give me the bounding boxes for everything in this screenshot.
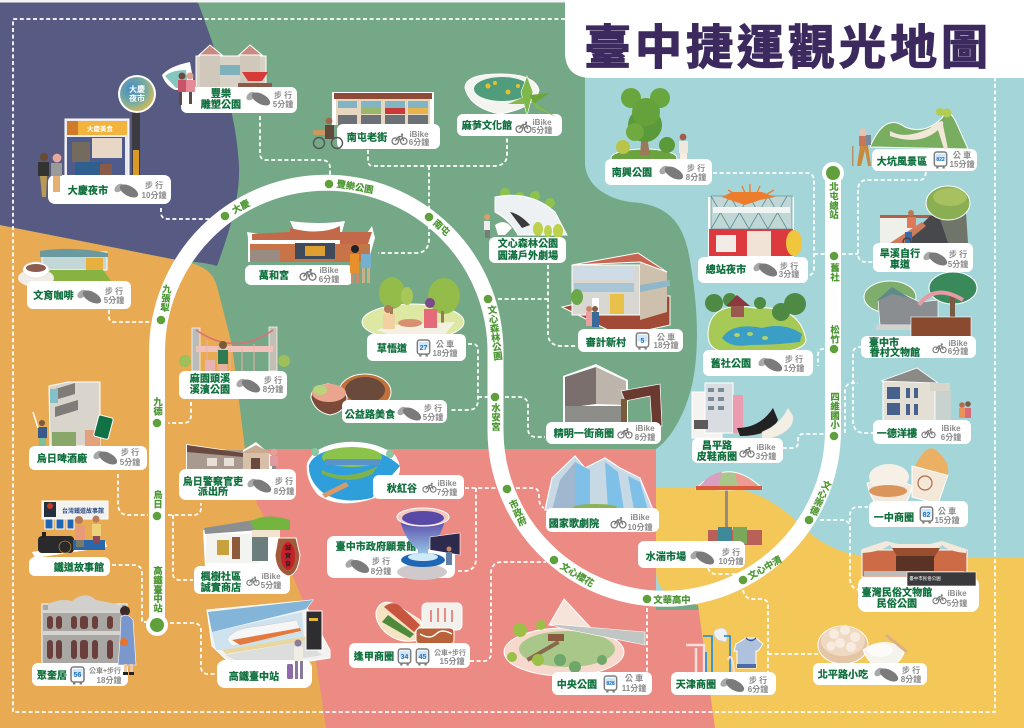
metro stations: 舊社: [829, 262, 840, 282]
landmark: 高鐵臺中站: [207, 600, 330, 688]
label: 步 行: [275, 476, 293, 486]
label: [546, 508, 659, 532]
illustration: national theater: [545, 456, 653, 510]
label: [367, 334, 466, 361]
label: 步 行: [274, 90, 292, 100]
label: 5分鐘: [947, 598, 967, 608]
label: 15分鐘: [440, 656, 464, 666]
landmark: 臺中市眷村文物館: [861, 272, 977, 359]
label: 10分鐘: [142, 190, 166, 200]
label: [552, 672, 652, 695]
label: 舊社公園: [711, 357, 751, 370]
label: 審計新村: [586, 336, 626, 349]
label: 麻園頭溪: [190, 372, 230, 385]
label: [698, 257, 808, 283]
label: 15分鐘: [950, 159, 974, 169]
illustration: jute leaves: [508, 76, 556, 117]
figure: woman in qipao: [118, 606, 136, 675]
label: 56: [74, 672, 81, 679]
label: 公 車: [436, 339, 454, 349]
illustration: shaved ice and cup: [867, 448, 948, 510]
label: 步 行: [785, 354, 803, 364]
metro stations: 文心崇德: [807, 478, 833, 518]
illustration: night market stall and station sign: [65, 75, 156, 177]
illustration: tree park and visitor: [611, 88, 688, 167]
illustration: central park: [504, 599, 645, 676]
label: [181, 87, 297, 113]
label: 5分鐘: [104, 295, 124, 305]
illustration: steam locomotive and visitors: 台灣鐵道故事館: [62, 507, 104, 515]
metro stations: 九張犁: [158, 283, 172, 313]
landmark: 公益路美食: [311, 374, 447, 423]
label: 18分鐘: [433, 348, 457, 358]
illustration: high speed rail platform: [207, 600, 330, 668]
label: 秋紅谷: [387, 482, 417, 495]
label: iBike: [409, 130, 429, 139]
label: [671, 672, 776, 695]
label: [29, 446, 147, 470]
label: 萬和宮: [259, 269, 289, 282]
label: 公 車: [938, 506, 956, 516]
label: 8分鐘: [686, 172, 706, 182]
metro stations: 文華高中: [653, 594, 691, 605]
label: 烏日啤酒廠: [37, 452, 87, 465]
illustration: western style house: [881, 368, 971, 421]
label: [489, 237, 566, 263]
label: 公車+步行: [434, 648, 466, 657]
label: iBike: [261, 572, 281, 581]
label: 公 車: [953, 150, 971, 160]
label: [873, 420, 971, 444]
landmark: 烏日警察官吏派出所: [179, 442, 296, 500]
illustration: hill trail and hiker: [852, 108, 968, 166]
illustration: night market stall and station sign: 大慶: [129, 84, 145, 94]
label: 步 行: [372, 556, 390, 566]
label: [873, 243, 973, 272]
landmark: 豐樂雕塑公園: [162, 45, 297, 113]
label: 8分鐘: [263, 384, 283, 394]
label: 6分鐘: [409, 137, 429, 147]
label: 圓滿戶外劇場: [498, 249, 558, 262]
illustration: temple: [247, 221, 375, 262]
illustration: hot pot and bowl: [311, 374, 391, 415]
landmark: 麻園頭溪溪濱公園: [179, 327, 290, 399]
illustration: picnic in the park: [362, 277, 464, 340]
metro stations: 大慶: [230, 197, 252, 216]
label: [546, 422, 661, 444]
label: 5: [641, 338, 645, 345]
label: 草悟道: [377, 342, 407, 355]
label: 總站夜市: [706, 263, 746, 276]
label: 楓樹社區: [201, 570, 241, 583]
landmark: 鐵道故事館: [29, 501, 110, 576]
label: 烏日警察官吏: [183, 475, 243, 488]
label: 天津商圈: [676, 678, 716, 691]
landmark: 水湍市場: [638, 472, 762, 568]
landmark: 秋紅谷: [307, 442, 464, 503]
label: 3分鐘: [779, 269, 799, 279]
illustration: coffee cup and building: [18, 249, 111, 287]
label: 步 行: [902, 665, 920, 675]
label: 步 行: [949, 249, 967, 259]
label: iBike: [630, 513, 650, 522]
landmark: 南興公園: [605, 88, 712, 185]
illustration: steamer basket and dumplings: [818, 625, 907, 668]
label: 旱溪自行: [880, 247, 920, 260]
label: 麻芛文化館: [462, 119, 512, 132]
label: 昌平路: [702, 439, 732, 452]
landmark: 臺灣民俗文物館民俗公園: [858, 541, 979, 612]
label: [32, 663, 128, 686]
landmark: 旱溪自行車道: [873, 186, 973, 272]
label: 45: [419, 654, 426, 661]
metro stations: 北屯總站: [828, 181, 839, 220]
landmark: 大慶夜市: [38, 75, 171, 204]
label: iBike: [635, 424, 655, 433]
illustration: old street shops: [332, 92, 434, 125]
label: 公 車: [657, 332, 675, 342]
label: 27: [420, 345, 427, 352]
landmark: 國家歌劇院: [545, 456, 659, 532]
label: 派出所: [198, 485, 228, 498]
label: 眷村文物館: [870, 346, 920, 359]
label: 精明一街商圈: [554, 427, 614, 440]
landmark: 北平路小吃: [813, 625, 927, 685]
label: 誠實商店: [201, 581, 241, 594]
illustration: sausage roll and takoyaki: [376, 602, 462, 644]
illustration: jute leaf soup bowl: [465, 74, 539, 114]
illustration: folk museum courtyard: [862, 541, 967, 577]
metro stations: 文心中清: [746, 553, 784, 582]
illustration: night market gate: [708, 184, 802, 259]
illustration: park with pond and pavilion: [705, 293, 806, 352]
illustration: outdoor theatre shell: [484, 188, 567, 238]
illustration: vision museum fountain: [397, 508, 460, 580]
landmark: 文心森林公園圓滿戶外劇場: [484, 188, 567, 263]
illustration: riverside bike path: [880, 186, 970, 246]
metro stations: 文心森林公園: [486, 304, 503, 362]
label: [638, 541, 745, 568]
label: [872, 149, 977, 171]
label: 6分鐘: [948, 346, 968, 356]
label: [692, 438, 783, 463]
label: 11分鐘: [622, 683, 646, 693]
label: 步 行: [687, 163, 705, 173]
label: 8分鐘: [901, 674, 921, 684]
label: 步 行: [722, 547, 740, 557]
label: 5分鐘: [273, 99, 293, 109]
label: iBike: [532, 118, 552, 127]
metro stations: 市政府: [506, 497, 528, 529]
label: 5分鐘: [532, 125, 552, 135]
illustration: honesty wine jar: 食: [285, 560, 291, 568]
label: [813, 663, 927, 685]
label: 大慶夜市: [68, 184, 108, 197]
label: 34: [401, 654, 408, 661]
label: [327, 536, 455, 578]
label: 臺中市: [869, 336, 899, 349]
illustration: historic mansion: [42, 595, 127, 664]
landmark: 一德洋樓: [873, 368, 971, 444]
label: 步 行: [121, 447, 139, 457]
illustration: lake park: [307, 442, 400, 503]
label: 步 行: [749, 675, 767, 685]
metro stations: 水安宮: [490, 402, 501, 432]
label: 高鐵臺中站: [229, 670, 279, 683]
label: 18分鐘: [97, 675, 121, 685]
label: [349, 643, 470, 668]
label: 6分鐘: [941, 432, 961, 442]
label: 公益路美食: [345, 408, 395, 421]
landmark: 臺中市政府願景館: [327, 508, 460, 580]
metro stations: 九德: [152, 396, 163, 416]
landmark: 逢甲商圈: [349, 602, 470, 668]
illustration: buildings and shoes: [692, 383, 793, 438]
label: 鐵道故事館: [54, 561, 104, 574]
label: 臺灣民俗文物館: [862, 586, 932, 599]
label: [858, 577, 979, 612]
metro stations: 南屯: [431, 217, 453, 238]
illustration: building and arch gate: [563, 364, 662, 426]
illustration: historic police station: [186, 442, 278, 476]
landmark: 麻芛文化館: [457, 74, 562, 136]
illustration: honesty wine jar: 實: [285, 552, 291, 560]
label: 10分鐘: [628, 522, 652, 532]
label: 聚奎居: [37, 669, 67, 682]
metro route line: [146, 162, 844, 636]
label: 1分鐘: [784, 363, 804, 373]
landmark: 昌平路皮鞋商圈: [692, 383, 793, 463]
label: 逢甲商圈: [354, 650, 394, 663]
landmark: 大坑風景區: [852, 108, 977, 171]
label: [703, 350, 813, 376]
metro stations: 文心櫻花: [558, 560, 596, 589]
label: 10分鐘: [719, 556, 743, 566]
label: 822: [936, 157, 945, 163]
title panel: 臺中捷運觀光地圖: [584, 21, 992, 74]
label: 15分鐘: [935, 515, 959, 525]
label: 南興公園: [612, 166, 652, 179]
title panel: [565, 0, 1024, 78]
figure: traveller with suitcase: [287, 640, 303, 679]
illustration: sculpture park building: [162, 45, 272, 90]
illustration: clothes and racks: [686, 628, 763, 672]
figures: visitors: [178, 72, 195, 105]
metro stations: 豐樂公園: [336, 178, 374, 195]
landmark: 中央公園: [504, 599, 652, 695]
label: 18分鐘: [654, 340, 678, 350]
label: 7分鐘: [437, 487, 457, 497]
label: 828: [606, 681, 615, 687]
illustration: night market stall and station sign: 大慶美食: [87, 124, 114, 133]
illustration: night market stall and station sign: 夜市: [129, 93, 145, 103]
label: iBike: [941, 424, 961, 433]
landmark: 萬和宮: [245, 221, 375, 285]
landmark: 審計新村: [562, 253, 683, 352]
label: 雕塑公園: [201, 98, 241, 111]
label: 8分鐘: [635, 432, 655, 442]
illustration: brewery building and visitor: [33, 382, 114, 448]
label: 6分鐘: [748, 684, 768, 694]
label: 文育咖啡: [33, 289, 74, 302]
metro stations: 烏日: [152, 489, 163, 509]
landmark: 草悟道: [362, 277, 466, 361]
landmark: 一中商圈: [867, 448, 968, 527]
label: 北平路小吃: [818, 668, 868, 681]
label: iBike: [437, 479, 457, 488]
label: 一中商圈: [874, 511, 914, 524]
label: 8分鐘: [371, 566, 391, 576]
label: 民俗公園: [877, 597, 917, 610]
label: iBike: [319, 266, 339, 275]
label: 步 行: [424, 403, 442, 413]
landmark: 文育咖啡: [18, 249, 131, 309]
landmark: 楓樹社區誠實商店: [194, 516, 300, 594]
landmark: 總站夜市: [698, 184, 808, 283]
label: 82: [923, 512, 930, 519]
label: 5分鐘: [261, 580, 281, 590]
label: 文心森林公園: [498, 237, 558, 250]
label: [27, 281, 131, 309]
illustration: market umbrella: [696, 472, 762, 545]
label: [578, 329, 683, 352]
label: 8分鐘: [274, 486, 294, 496]
label: 車道: [890, 258, 910, 271]
museum sign: 臺中市民俗公園: [909, 575, 941, 582]
label: [605, 159, 712, 185]
landmark: 聚奎居: [32, 595, 136, 686]
label: 步 行: [264, 375, 282, 385]
label: [457, 114, 562, 136]
figures: couple: [38, 153, 62, 197]
label: 豐樂: [211, 87, 231, 100]
label: 一德洋樓: [877, 427, 917, 440]
illustration: honesty wine jar: [275, 538, 300, 576]
figures: visitors: [350, 245, 371, 284]
label: [373, 475, 464, 499]
landmark: 天津商圈: [671, 628, 776, 695]
label: 3分鐘: [756, 451, 776, 461]
label: [179, 371, 287, 399]
landmark: 烏日啤酒廠: [29, 382, 147, 470]
label: [861, 336, 976, 359]
label: 5分鐘: [423, 412, 443, 422]
illustration: honesty shop: [203, 516, 290, 568]
dashed connectors between stations and landmarks: [109, 116, 926, 674]
label: [194, 566, 290, 594]
metro stations: 四維國小: [829, 392, 840, 430]
illustration: honesty wine jar: 誠: [285, 544, 291, 552]
metro stations: 高鐵臺中站: [152, 565, 163, 613]
illustration: military village museum: [864, 272, 977, 337]
label: 大坑風景區: [877, 155, 927, 168]
label: 皮鞋商圈: [697, 450, 737, 463]
label: 溪濱公園: [190, 383, 230, 396]
label: 5分鐘: [948, 259, 968, 269]
landmark: 舊社公園: [703, 293, 813, 376]
label: 公 車: [625, 673, 643, 683]
label: [337, 124, 440, 149]
label: [342, 400, 447, 423]
landmark: 南屯老街: [313, 92, 440, 149]
label: [179, 469, 296, 500]
label: [245, 265, 353, 285]
label: 中央公園: [557, 678, 597, 691]
label: 步 行: [105, 286, 123, 296]
label: 臺中市政府願景館: [336, 540, 416, 553]
label: 國家歌劇院: [549, 517, 599, 530]
label: 6分鐘: [319, 274, 339, 284]
label: 南屯老街: [347, 131, 387, 144]
label: 步 行: [145, 180, 163, 190]
label: 5分鐘: [120, 457, 140, 467]
illustration: suspension bridge park: [179, 327, 290, 372]
landmark: 精明一街商圈: [546, 364, 662, 444]
label: [48, 175, 171, 204]
label: 公車+步行: [89, 666, 121, 675]
label: iBike: [948, 339, 968, 348]
label: iBike: [947, 589, 967, 598]
label: [869, 501, 968, 527]
metro stations: 松竹: [829, 324, 840, 344]
metro stations: [150, 166, 840, 632]
label: 步 行: [780, 261, 798, 271]
label: 水湍市場: [646, 550, 686, 563]
illustration: two-storey house: [562, 253, 670, 336]
figure: cyclist: [313, 118, 342, 148]
label: iBike: [756, 443, 776, 452]
